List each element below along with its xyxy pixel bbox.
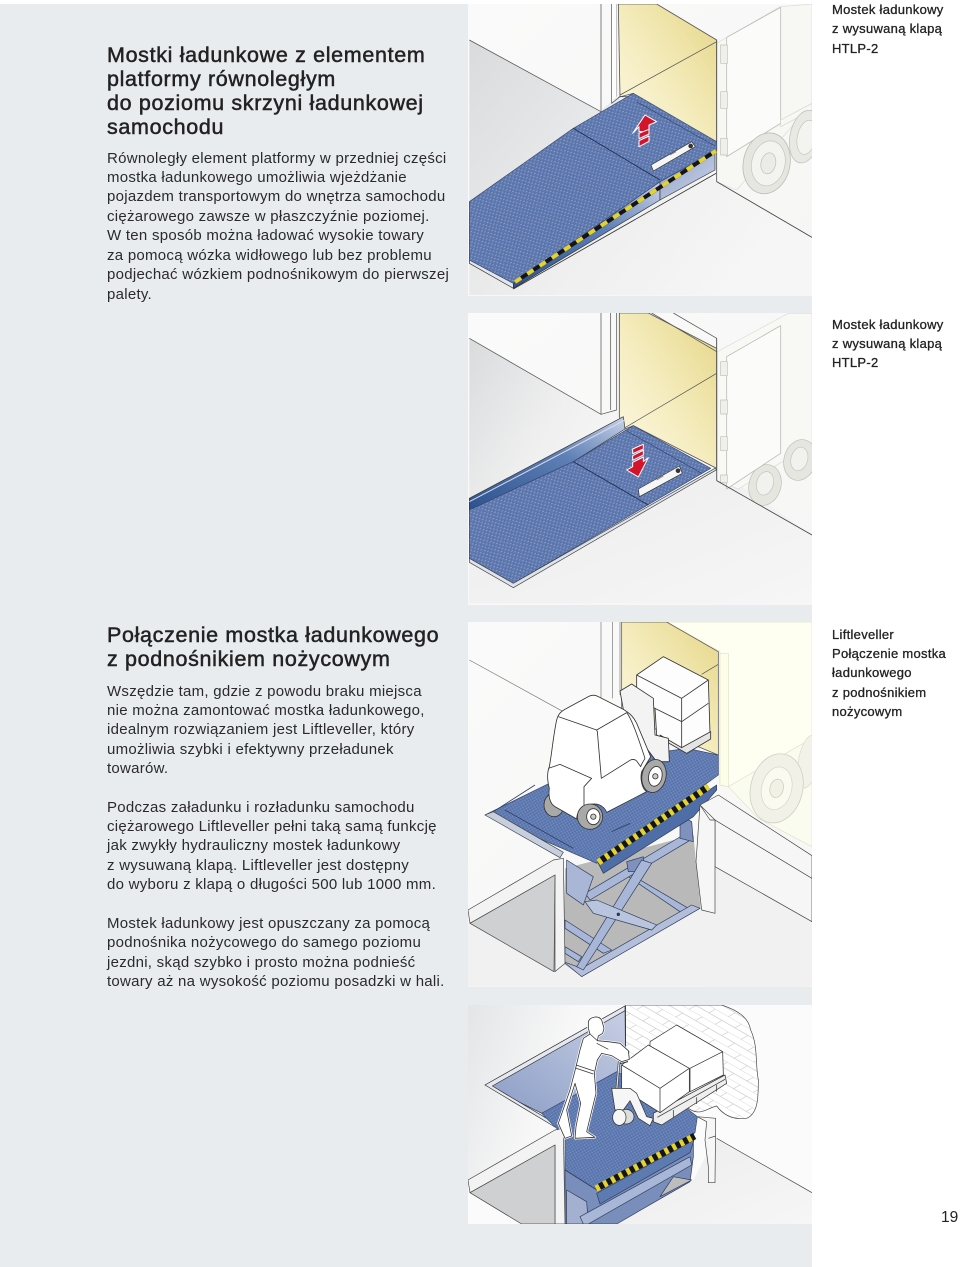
text block: lowering to road level: podnośnika nożycowego do samego poziomu: [107, 934, 421, 951]
level sensor bar: [638, 466, 682, 497]
label: HTLP-2 raised: HTLP-2: [832, 41, 879, 56]
platform front face: [598, 785, 717, 873]
loading floor: [469, 40, 812, 295]
pit floor: [563, 835, 701, 977]
text block: where to use Liftleveller: [107, 682, 425, 777]
scissor frame: [565, 1133, 694, 1224]
label: Liftleveller: Liftleveller: [832, 626, 894, 642]
floor left: [469, 338, 623, 502]
truck: [717, 313, 821, 509]
under-platform side and base: [469, 152, 716, 289]
checker plate ramp: [469, 426, 711, 583]
rear box: [650, 1025, 723, 1092]
label: Liftleveller: Połączenie mostka: [832, 646, 946, 661]
rear wheel left: [544, 793, 564, 817]
floor right: [469, 469, 812, 603]
checker plate ramp: [469, 93, 717, 283]
man: [558, 1017, 629, 1138]
panel background: [468, 622, 812, 987]
heading: platform parallel: platformy równoległym: [107, 67, 336, 91]
hand pallet truck: [612, 1050, 653, 1126]
illustration: Liftleveller with forklift: [468, 622, 812, 987]
text block: platform description: pojazdem transportowym do wnętrza samochodu: [107, 188, 445, 205]
yellow truck interior: [618, 4, 717, 150]
man with pallet truck and boxes: [558, 1017, 727, 1138]
lifted platform: [542, 1072, 697, 1190]
text block: lowering to road level: towary aż na wysokość poziomu posadzki w hali.: [107, 973, 445, 990]
left wall block: [468, 1128, 565, 1224]
left pit wall: [468, 858, 565, 972]
label: HTLP-2 lowered: Mostek ładunkowy: [832, 316, 944, 332]
yellow truck interior: [619, 313, 717, 468]
illustration: Liftleveller with pallet truck: [468, 1005, 812, 1224]
panel background: [468, 4, 812, 296]
hazard stripe: [515, 151, 716, 282]
text block: where to use Liftleveller: towarów.: [107, 760, 168, 777]
text block: Liftleveller function: Podczas załadunku i rozładunku samochodu: [107, 798, 415, 816]
heading: scissor lift combination: Połączenie mostka ładunkowego: [107, 623, 439, 647]
scissor mechanism: [563, 815, 700, 977]
right pit wall: [696, 795, 812, 922]
text block: Liftleveller function: ciężarowego Liftleveller pełni taką samą funkcję: [107, 818, 437, 835]
label: HTLP-2 raised: [832, 2, 944, 56]
wall and jamb: [469, 313, 617, 414]
text block: platform description: Równoległy element platformy w przedniej części: [107, 150, 446, 166]
panel background: [468, 313, 812, 605]
yellow truck interior: [622, 622, 718, 755]
illustration: dock leveller lowered: [468, 313, 812, 605]
hazard stripe: [596, 1136, 695, 1189]
truck: [667, 622, 823, 847]
hazard stripe: [598, 787, 708, 862]
platform: [485, 748, 718, 863]
front wheel left: [577, 804, 603, 829]
red up arrow: [633, 115, 657, 147]
side wedge: [469, 417, 625, 510]
forklift: [544, 657, 711, 829]
heading: platform parallel: Mostki ładunkowe z elementem: [107, 43, 425, 67]
text block: platform description: ciężarowego zawsze w płaszczyźnie poziomej.: [107, 208, 430, 225]
heading: scissor lift combination: z podnośnikiem nożycowym: [107, 647, 391, 671]
text block: platform description: [107, 150, 449, 303]
label: HTLP-2 lowered: z wysuwaną klapą: [832, 336, 942, 351]
mast: [620, 684, 669, 762]
load boxes: [637, 657, 711, 753]
left floor shade: [468, 1005, 625, 1182]
page number: 19: [941, 1209, 958, 1226]
front box: [622, 1045, 689, 1113]
text block: platform description: mostka ładunkowego umożliwia wjeżdżanie: [107, 169, 407, 186]
heading: platform parallel: [107, 43, 425, 139]
text block: platform description: podjechać wózkiem podnośnikowym do pierwszej: [107, 266, 449, 283]
panel background: [468, 1005, 812, 1224]
brick wall: [626, 1005, 758, 1119]
label: HTLP-2 lowered: [832, 316, 944, 370]
text block: lowering to road level: jezdni, skąd szybko i prosto można podnieść: [107, 954, 415, 971]
heading: platform parallel: samochodu: [107, 115, 224, 139]
right floor: [617, 1138, 812, 1224]
pallet: [653, 1075, 727, 1125]
platform edge: [469, 468, 717, 588]
text block: platform description: za pomocą wózka widłowego lub bez problemu: [107, 247, 432, 264]
platform frame: [493, 785, 630, 848]
text block: lowering to road level: Mostek ładunkowy jest opuszczany za pomocą: [107, 915, 430, 932]
text block: Liftleveller function: z wysuwaną klapą. Liftleveller jest dostępny: [107, 857, 409, 874]
label: Liftleveller: ładunkowego: [832, 665, 912, 680]
red down arrow: [627, 444, 648, 477]
label: HTLP-2 lowered: HTLP-2: [832, 355, 879, 370]
label: Liftleveller: z podnośnikiem: [832, 685, 926, 700]
illustration: dock leveller raised: [468, 4, 812, 296]
truck: [717, 4, 825, 198]
cab body: [548, 695, 651, 819]
label: Liftleveller: [832, 626, 946, 719]
level sensor bar: [651, 142, 695, 171]
label: HTLP-2 raised: z wysuwaną klapą: [832, 21, 942, 36]
wall line: [469, 622, 620, 712]
text block: platform description: W ten sposób można ładować wysokie towary: [107, 227, 424, 244]
text block: where to use Liftleveller: nie można zamontować mostka ładunkowego,: [107, 702, 425, 719]
front wheel right: [639, 757, 669, 795]
text block: Liftleveller function: jak zwykły hydrauliczny mostek ładunkowy: [107, 837, 400, 854]
text block: where to use Liftleveller: umożliwia szybki i efektywny przeładunek: [107, 741, 394, 758]
text block: where to use Liftleveller: idealnym rozwiązaniem jest Liftleveller, który: [107, 721, 415, 738]
building wall and jamb: [469, 4, 620, 112]
text block: lowering to road level: [106, 915, 445, 990]
right wall column: [697, 1117, 812, 1193]
label: HTLP-2 raised: Mostek ładunkowy: [832, 2, 944, 17]
label: Liftleveller: nożycowym: [832, 704, 903, 719]
floor: [468, 867, 812, 987]
text block: Liftleveller function: do wyboru z klapą o długości 500 lub 1000 mm.: [107, 876, 436, 893]
heading: platform parallel: do poziomu skrzyni ładunkowej: [107, 91, 424, 115]
pit back wall: [485, 1006, 626, 1130]
text block: where to use Liftleveller: Wszędzie tam, gdzie z powodu braku miejsca: [107, 682, 422, 700]
heading: scissor lift combination: [107, 623, 439, 671]
text block: platform description: palety.: [107, 286, 152, 303]
text block: Liftleveller function: [106, 798, 437, 893]
